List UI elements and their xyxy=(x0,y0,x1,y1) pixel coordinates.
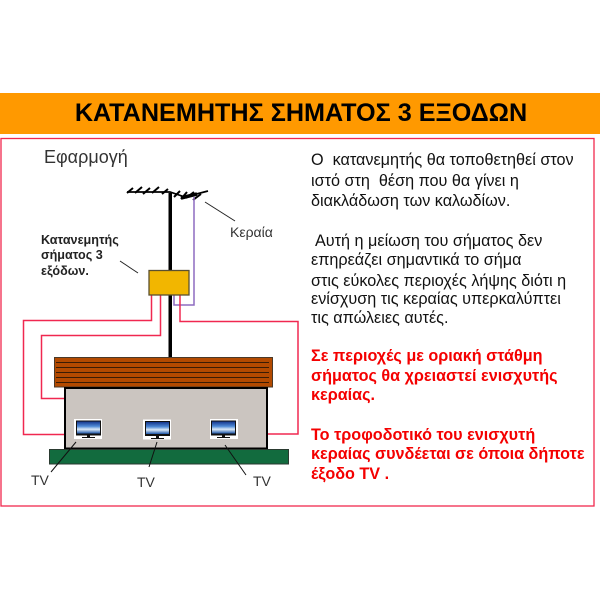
house xyxy=(50,358,288,464)
diagram: antenna installation xyxy=(24,187,298,490)
label: splitter: εξόδων. xyxy=(41,264,89,278)
TV labels: TV xyxy=(31,472,50,488)
text block: power supply note: κεραίας συνδέεται σε όποια δήποτε xyxy=(311,445,585,463)
roof xyxy=(54,358,272,387)
text block: signal reduction: στις εύκολες περιοχές λήψης διότι η xyxy=(311,272,566,290)
title banner xyxy=(0,93,600,134)
text block: installation description: ιστό στη θέση που θα γίνει η xyxy=(311,172,519,190)
text block: installation description: Ο κατανεμητής θα τοποθετηθεί στον xyxy=(311,151,574,169)
label: splitter: σήματος 3 xyxy=(41,248,103,262)
TV labels: TV xyxy=(137,474,156,490)
text block: signal reduction: ενίσχυση τις κεραίας υπερκαλύπτει xyxy=(311,290,561,308)
heading: application: Εφαρμογή xyxy=(44,147,128,167)
text block: marginal signal warning: κεραίας. xyxy=(311,386,375,404)
icon: TV 2 xyxy=(143,420,171,440)
splitter box xyxy=(149,270,189,295)
mast xyxy=(168,193,172,357)
text block: installation description: διακλάδωση των καλωδίων. xyxy=(311,192,510,210)
title banner: ΚΑΤΑΝΕΜΗΤΗΣ ΣΗΜΑΤΟΣ 3 ΕΞΟΔΩΝ xyxy=(75,99,527,127)
label: splitter: Κατανεμητής xyxy=(41,233,119,247)
text block: signal reduction: επηρεάζει σημαντικά το σήμα xyxy=(311,251,521,269)
TV labels: TV xyxy=(253,473,272,489)
TV labels xyxy=(31,472,272,490)
text block: power supply note: Το τροφοδοτικό του ενισχυτή xyxy=(311,426,535,444)
callout line: splitter xyxy=(120,261,138,273)
icon: TV 1 xyxy=(74,419,102,439)
text block: marginal signal warning: σήματος θα χρειαστεί ενισχυτής xyxy=(311,367,558,385)
panel frame xyxy=(1,138,594,506)
text block: marginal signal warning: Σε περιοχές με οριακή στάθμη xyxy=(311,347,543,365)
cables: splitter to TVs xyxy=(24,295,298,434)
cable: antenna to splitter xyxy=(174,197,194,305)
icon: antenna xyxy=(127,187,208,200)
icon: TV 3 xyxy=(210,419,238,439)
text block: signal reduction: τις απώλειες αυτές. xyxy=(311,309,448,327)
label: antenna: Κεραία xyxy=(230,224,273,240)
TV callout lines xyxy=(51,442,246,475)
text block: signal reduction: Αυτή η μείωση του σήματος δεν xyxy=(315,232,542,250)
ground xyxy=(50,450,288,464)
callout line: antenna xyxy=(205,202,235,221)
wall xyxy=(65,388,267,448)
text block: power supply note: έξοδο TV . xyxy=(311,465,389,483)
